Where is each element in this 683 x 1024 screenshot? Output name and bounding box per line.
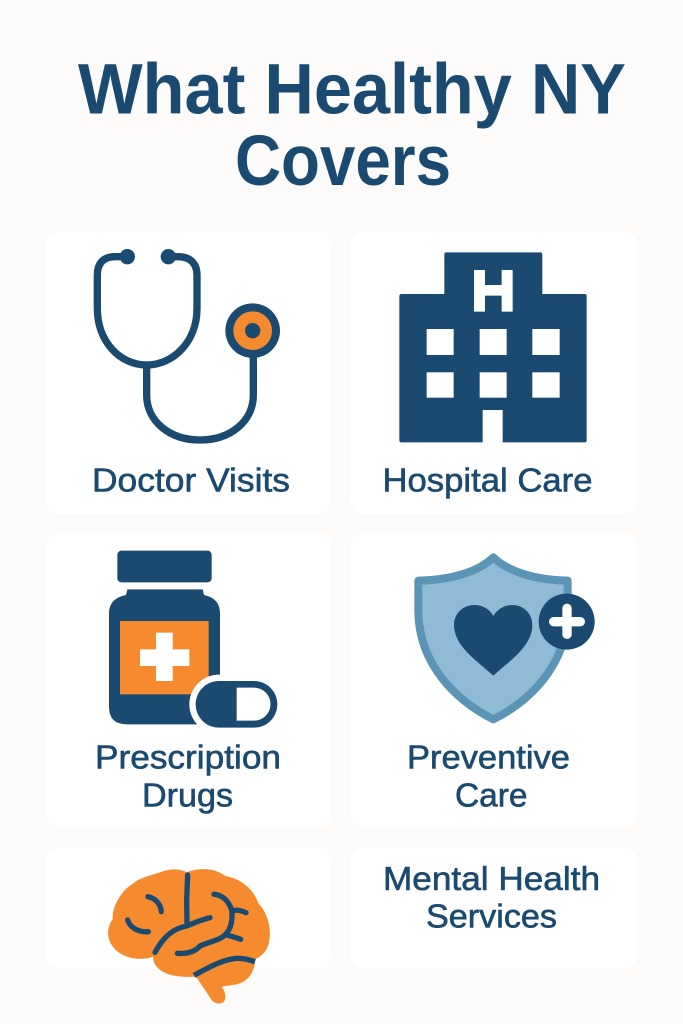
label: Preventive (407, 738, 570, 776)
panel: doctor visits (46, 231, 331, 514)
card background (46, 231, 331, 514)
panel: brain card (46, 847, 331, 1004)
card background (46, 847, 331, 969)
icon: brain (108, 869, 270, 1004)
card background (351, 231, 637, 514)
card background (351, 533, 637, 827)
label: Hospital Care (382, 462, 592, 498)
icon: shield with heart and plus (418, 557, 595, 719)
panel: hospital care (351, 231, 637, 514)
label (407, 738, 570, 814)
card background (46, 533, 331, 827)
panel: preventive care (351, 533, 637, 827)
label (383, 860, 600, 934)
title (78, 50, 626, 201)
label: Drugs (142, 776, 233, 814)
label: Doctor Visits (92, 462, 290, 498)
card background (351, 847, 637, 969)
title: Covers (235, 122, 451, 201)
icon: stethoscope (97, 249, 280, 440)
label: Prescription (95, 738, 281, 776)
panel: mental health services (351, 847, 637, 969)
title: What Healthy NY (78, 50, 626, 130)
icon: hospital building (399, 252, 587, 442)
label (95, 738, 281, 814)
label: Care (455, 776, 528, 814)
label: Services (426, 898, 557, 934)
panel: prescription drugs (46, 533, 331, 827)
icon: pill bottle (109, 551, 284, 734)
label: Mental Health (383, 860, 600, 897)
